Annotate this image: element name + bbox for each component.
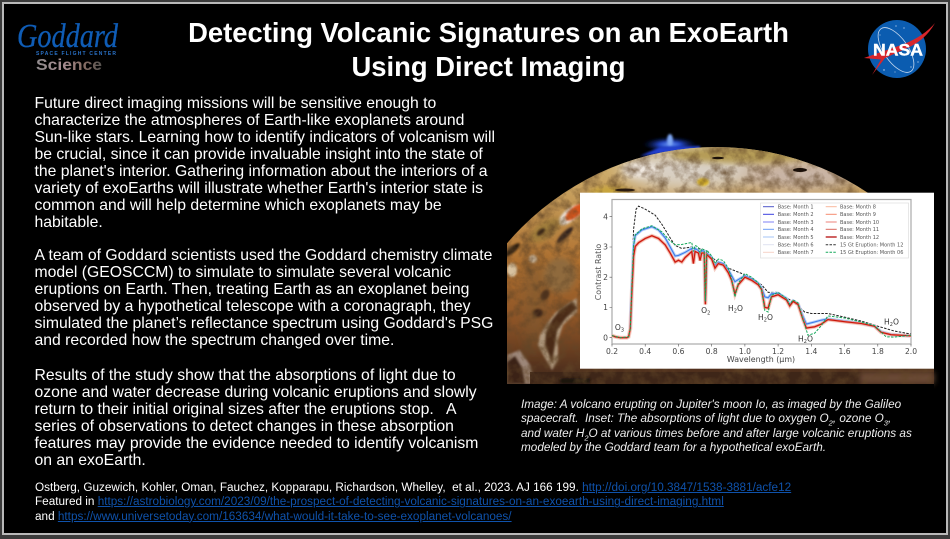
blue disc [868, 20, 926, 78]
axis tick labels: 1.8 [872, 347, 884, 356]
axis tick labels: 4 [603, 212, 608, 222]
text block: intro paragraph: Sun-like stars. Learning how to identify indicators of volcanism will [34, 129, 495, 146]
left crop of image [495, 140, 507, 390]
image: Io, moon of Jupiter, with volcanic plume [495, 134, 934, 390]
absorption feature labels: 2 [707, 310, 710, 316]
Science wordmark: Science [36, 57, 102, 74]
title: Detecting Volcanic Signatures on an ExoEarth [188, 17, 789, 48]
axis tick labels: 0.2 [606, 347, 618, 356]
legend: Base: Month 9 [840, 212, 876, 218]
absorption feature labels: H [884, 318, 890, 326]
legend: 15 Gt Eruption: Month 06 [840, 250, 903, 256]
legend: Base: Month 2 [778, 212, 814, 218]
title: Using Direct Imaging [352, 51, 625, 82]
Space Flight Center line: SPACE FLIGHT CENTER [36, 51, 116, 57]
Io surface [502, 140, 934, 384]
text block: intro paragraph: the planet's interior. Gathering information about the interiors of a [34, 163, 488, 180]
y axis title: Contrast Ratio [594, 244, 603, 300]
logo: NASA meatball [864, 20, 935, 78]
red chevron [864, 23, 935, 75]
axis tick labels: 0.4 [639, 347, 651, 356]
absorption feature labels: O [615, 323, 621, 332]
absorption feature labels: O [767, 313, 773, 322]
text block: results paragraph: on an exoEarth. [34, 452, 146, 469]
spectra lines [612, 206, 911, 338]
absorption feature labels [615, 304, 899, 345]
text block: results paragraph: series of observations to detect changes in these absorption [34, 418, 454, 435]
axis tick labels: 2 [603, 273, 608, 282]
legend: Base: Month 7 [778, 250, 814, 256]
text block: simulation paragraph: A team of Goddard scientists used the Goddard chemistry climate [34, 247, 492, 264]
legend: Base: Month 3 [778, 220, 814, 226]
legend: Base: Month 6 [778, 242, 814, 248]
text block: simulation paragraph: observed by a hypothetical telescope with a coronagraph, they [34, 298, 471, 315]
text block: results paragraph: Results of the study show that the absorptions of light due to [34, 367, 456, 384]
inset chart: contrast ratio vs wavelength [580, 193, 934, 369]
legend: Base: Month 10 [840, 220, 879, 226]
image caption: and water H2O at various times before and after large volcanic eruptions as [521, 427, 912, 442]
volcanic plume [640, 134, 700, 156]
text block: results paragraph: return to their initial original sizes after the eruptions stop. A [34, 401, 456, 418]
citation and links [35, 481, 792, 523]
axis tick labels: 0.6 [672, 347, 685, 356]
axis tick labels: 2.0 [905, 347, 917, 356]
image caption: spacecraft. Inset: The absorptions of light due to oxygen O2, ozone O3, [521, 412, 891, 428]
axis tick labels: 1.0 [739, 347, 751, 356]
text block: intro paragraph: variety of exoEarths will illustrate whether Earth's interior state is [34, 180, 483, 197]
orbit [871, 22, 921, 78]
absorption feature labels: 2 [804, 339, 807, 345]
stars [880, 25, 919, 72]
dark lava flows [538, 298, 577, 370]
legend: Base: Month 8 [840, 204, 876, 210]
text block: simulation paragraph: eruptions on Earth. Then, treating Earth as an exoplanet being [34, 281, 469, 298]
text block: simulation paragraph: simulated the planet’s reflectance spectrum using Goddard's PSG [34, 315, 493, 332]
citation and links: and https://www.universetoday.com/163634/what-would-it-take-to-see-exoplanet-volcanoes/ [35, 510, 512, 523]
absorption feature labels: O [807, 334, 813, 344]
absorption feature labels: 3 [621, 328, 624, 334]
text block: results paragraph: ozone and water decrease during volcanic eruptions and slowly [34, 384, 477, 401]
tick marks [610, 217, 911, 346]
logo: Goddard Space Flight Center Science [17, 18, 119, 74]
text block: intro paragraph: habitable. [34, 214, 103, 231]
legend [760, 203, 908, 258]
legend: Base: Month 4 [778, 227, 814, 233]
text block: intro paragraph [34, 95, 495, 231]
citation and links: Featured in https://astrobiology.com/2023/09/the-prospect-of-detecting-volcanic-signatures-on-an-exoearth-using-direct-imaging.html [35, 495, 724, 508]
axis tick labels: 1 [603, 303, 608, 312]
text block: simulation paragraph: model (GEOSCCM) to simulate to simulate several volcanic [34, 264, 451, 281]
legend: Base: Month 11 [840, 227, 879, 233]
text block: intro paragraph: characterize the atmospheres of Earth-like exoplanets around [34, 112, 464, 129]
text block: simulation paragraph: and recorded how the spectrum changed over time. [34, 332, 394, 349]
Goddard wordmark: Goddard [17, 18, 119, 55]
text block: results paragraph: features may provide the evidence needed to identify volcanism [34, 435, 478, 452]
image caption [521, 398, 912, 454]
axis tick labels: 1.4 [805, 347, 818, 356]
axis tick labels: 0.8 [706, 347, 718, 356]
axis tick labels: 1.6 [838, 347, 851, 356]
absorption feature labels: O [701, 306, 707, 315]
image caption: Image: A volcano erupting on Jupiter's moon Io, as imaged by the Galileo [521, 398, 901, 411]
bottom crop of image [495, 384, 934, 390]
image caption: modeled by the Goddard team for a hypothetical exoEarth. [521, 441, 826, 454]
text block: simulation paragraph [34, 247, 493, 349]
chart background [580, 193, 934, 369]
legend: Base: Month 12 [840, 235, 879, 241]
absorption feature labels: H [758, 313, 764, 322]
axis tick labels: 3 [603, 243, 608, 252]
absorption feature labels: O [893, 318, 899, 326]
title [188, 17, 789, 82]
absorption feature labels: O [737, 304, 743, 313]
text block: intro paragraph: Future direct imaging missions will be sensitive enough to [34, 95, 436, 112]
legend: 15 Gt Eruption: Month 12 [840, 242, 903, 248]
text block: intro paragraph: be crucial, since it can provide invaluable insight into the state of [34, 146, 483, 163]
legend: Base: Month 1 [778, 204, 814, 210]
absorption feature labels: H [728, 304, 734, 313]
text block: intro paragraph: common and will help determine which exoplanets may be [34, 197, 442, 214]
axis tick labels: 0 [603, 334, 608, 342]
absorption feature labels: 2 [764, 318, 767, 324]
axis tick labels: 1.2 [772, 347, 784, 356]
absorption feature labels: H [798, 334, 804, 344]
NASA lettering: NASA [873, 42, 923, 60]
axis tick labels [603, 212, 917, 356]
legend: Base: Month 5 [778, 235, 814, 241]
citation and links: Ostberg, Guzewich, Kohler, Oman, Fauchez, Kopparapu, Richardson, Whelley, et al., 2023. AJ 166 199. http://doi.org/10.3847/1538-3881/acfe12 [35, 481, 791, 494]
absorption feature labels: 2 [890, 322, 893, 328]
text block: results paragraph [34, 367, 478, 469]
absorption feature labels: 2 [734, 308, 737, 314]
plot axes frame [612, 200, 911, 344]
x axis title: Wavelength (µm) [727, 355, 795, 364]
